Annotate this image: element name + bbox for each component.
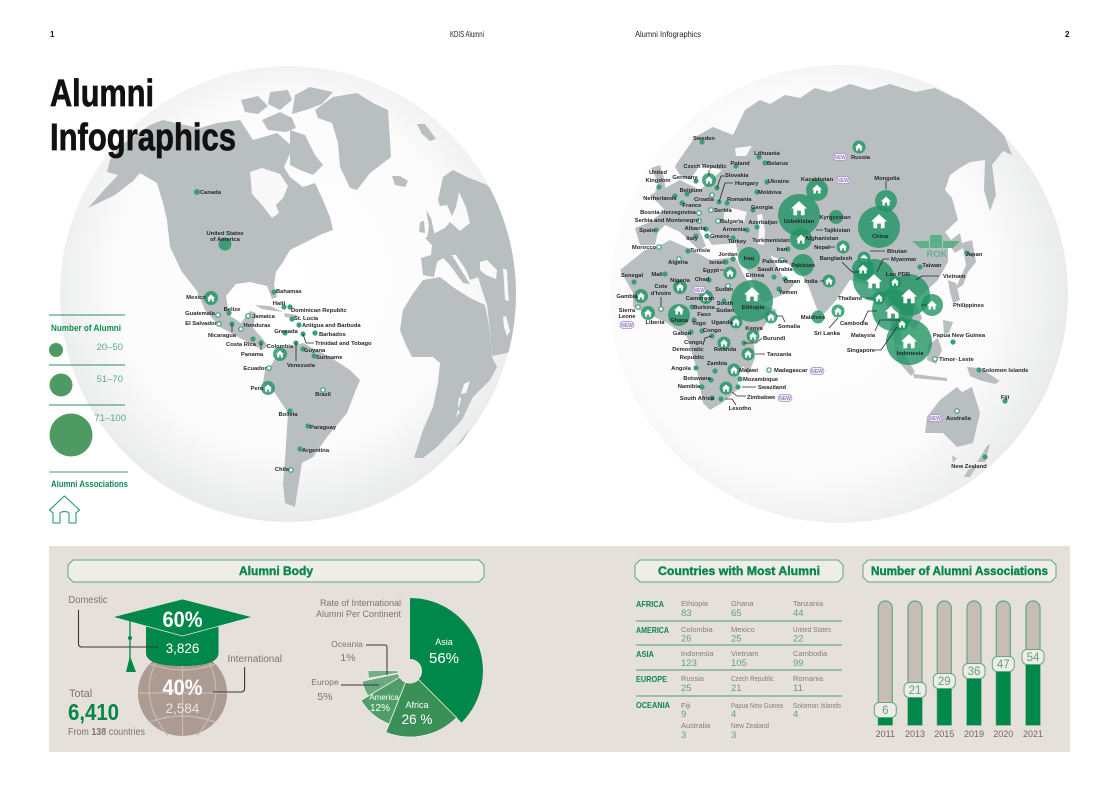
icon: globe (138, 650, 227, 736)
chart label: Oceania: 1% (340, 652, 356, 664)
labels: Oceania: New Zealand (951, 464, 987, 470)
labels: Europe (635, 136, 790, 245)
row: Europe: Romania (793, 674, 824, 683)
labels: Africa: Nigeria (670, 278, 691, 284)
labels: Americas: Bolivia (278, 412, 298, 418)
labels: Americas: Trinidad and Tobago (315, 341, 372, 347)
labels: Asia: Bhutan (887, 249, 907, 255)
legend: medium circle (50, 374, 72, 396)
icon: house outline (50, 496, 80, 523)
markers: Europe (653, 139, 770, 241)
labels: Africa: Sierra (619, 308, 636, 314)
labels: Americas: St. Lucia (294, 316, 319, 322)
labels: Americas: Jamaica (252, 314, 276, 320)
row: Africa: 44 (793, 608, 804, 619)
row: America: Colombia (681, 625, 714, 634)
labels: Oceania: Solomon Islands (982, 368, 1028, 374)
row: Europe: Russia (681, 674, 705, 683)
page header (50, 30, 1070, 39)
labels: Europe: Hungary (735, 181, 759, 187)
labels: Oceania (933, 333, 1028, 470)
bar: 2019 (963, 601, 985, 739)
labels: Europe: Greece (710, 234, 730, 240)
labels: Africa: Zambia (707, 361, 728, 367)
labels: Africa: Gambia (616, 294, 638, 300)
labels: Asia: Thailand (838, 296, 862, 302)
labels: Africa: Rwanda (714, 347, 737, 353)
labels: Europe: Romania (727, 197, 752, 203)
labels: Americas: Antigua and Barbuda (302, 323, 361, 329)
emblem: ROK (912, 235, 960, 259)
labels: Africa: Ghana (670, 318, 689, 324)
labels: Asia: Mongolia (874, 176, 900, 182)
labels: Europe: Serbia (714, 208, 732, 214)
markers: Americas (194, 189, 325, 472)
labels: Africa (616, 245, 808, 412)
bar: 2015: 2015 (934, 729, 954, 739)
labels: Americas: Venezuela (287, 363, 316, 369)
labels: Europe: Italy (686, 236, 699, 242)
labels: Africa: South (717, 301, 734, 307)
row: Oceania: OCEANIA (636, 700, 670, 710)
labels: Oceania: Papua New Guinea (933, 333, 986, 339)
labels: Europe: Germany (672, 175, 698, 181)
callout: international (213, 653, 282, 692)
badges: NEW: NEW (779, 396, 791, 402)
page header: 2 (1065, 30, 1070, 39)
labels: Asia: Kyrgyzstan (819, 215, 851, 221)
labels: Asia: Jordan (718, 252, 738, 258)
labels: Africa: Togo (692, 321, 706, 327)
labels: Africa: South Africa (680, 396, 715, 402)
chart label: Oceania (331, 639, 387, 675)
labels: Asia: Vietnam (943, 274, 965, 280)
labels: Asia: Bangladesh (820, 256, 853, 262)
labels: Asia: Nepal (814, 245, 830, 251)
labels: Africa: Gabon (673, 331, 692, 337)
labels: Europe: Ukraine (768, 179, 790, 185)
chart label: Oceania: Oceania (331, 639, 363, 649)
chart label: Asia (429, 637, 459, 667)
row: Asia: 105 (731, 658, 747, 669)
heading: associations (863, 560, 1056, 582)
value: total alumni: 6,410 (68, 699, 119, 725)
labels: Americas: Guatemala (185, 311, 216, 317)
labels: Asia: Timor- Leste (939, 357, 974, 363)
bar: 2021 (1022, 601, 1044, 739)
labels: Europe: Kingdom (645, 178, 671, 184)
labels: Africa: Madagascar (774, 368, 808, 374)
labels: Africa: Kenya (745, 326, 763, 332)
bar: 2019: 36 (968, 666, 980, 678)
row: Africa: AFRICA (636, 599, 664, 609)
labels: Asia: Indonesia (896, 351, 924, 357)
callout: domestic (68, 595, 158, 647)
bar: 2011: 2011 (876, 729, 895, 739)
panel: statistics background (49, 546, 1070, 752)
markers: Africa (631, 245, 785, 405)
chart label: Europe: Europe (311, 677, 339, 687)
chart label: Europe: 5% (317, 691, 333, 703)
row: America: United States (793, 625, 831, 634)
chart label: Africa (402, 700, 432, 727)
value: total alumni: Total (69, 688, 92, 700)
labels: Africa: Sudan (715, 287, 733, 293)
labels: Africa: Angola (671, 366, 692, 372)
bar: 2020: 2020 (993, 729, 1013, 739)
row: Asia (636, 649, 828, 669)
emblem: ROK: ROK (927, 249, 948, 259)
chart label: Europe (311, 677, 379, 703)
badges: NEW (620, 154, 942, 422)
labels: Americas: of America (210, 237, 241, 243)
labels: Asia: Russia (851, 155, 871, 161)
chart: alumni per continent pie (361, 598, 483, 737)
labels: Europe: Moldova (758, 190, 782, 196)
heading: associations: Number of Alumni Associations (871, 564, 1048, 578)
row: Oceania: Fiji (681, 701, 691, 710)
bar: 2013: 21 (909, 685, 921, 697)
labels: Americas: Suriname (316, 355, 343, 361)
row: Asia: 123 (681, 658, 697, 669)
labels: Europe: Armenia (722, 227, 746, 233)
bar: 2020 (992, 601, 1014, 739)
labels: Oceania: Fiji (1001, 395, 1010, 401)
chart label: America: America (369, 693, 399, 702)
title (50, 73, 236, 159)
labels: Europe: Albania (685, 226, 706, 232)
labels: Americas: Belize (224, 307, 241, 313)
labels: Africa: Republic (680, 355, 705, 361)
labels: Europe: Bosnia-Herzegovina (640, 210, 697, 216)
labels: Asia: Uzbekistan (784, 219, 815, 225)
panel: alumni body (68, 560, 484, 738)
row: Africa: Ethiopia (681, 599, 709, 608)
labels: Asia: Israel (709, 260, 725, 266)
legend: large circle (50, 414, 92, 456)
labels: Americas: Dominican Republic (291, 308, 347, 314)
bar: 2011: 6 (882, 705, 889, 717)
labels: Americas: Honduras (243, 323, 271, 329)
labels: Africa: Morocco (632, 245, 657, 251)
labels: Europe: United (649, 170, 667, 176)
value: total alumni (68, 688, 145, 738)
row: Asia: 99 (793, 658, 804, 669)
labels: Africa: Senegal (621, 273, 644, 279)
legend: alumni associations (49, 472, 128, 523)
chart label: Asia: 56% (429, 650, 459, 667)
legend: number of alumni: Number of Alumni (51, 323, 121, 333)
legend: alumni associations: Alumni Associations (51, 479, 128, 489)
chart label: Asia: Asia (435, 637, 453, 647)
row: Oceania (636, 700, 841, 741)
labels: Americas: Mexico (186, 295, 206, 301)
chart label: America: 12% (370, 703, 390, 714)
labels: Europe: Georgia (751, 205, 774, 211)
labels: Americas: Bahamas (276, 289, 302, 295)
chart label: title: Rate of International (320, 598, 401, 608)
labels: Africa: Burkina (693, 305, 716, 311)
bar: 2019: 2019 (964, 729, 984, 739)
labels: Africa: Cameroon (686, 296, 715, 302)
globe: Eurasia, Africa and Oceania (610, 65, 1068, 523)
row: Europe (636, 674, 824, 694)
legend: small circle (49, 343, 63, 357)
panel: countries with most alumni (635, 560, 843, 741)
row: Europe: EUROPE (636, 674, 667, 684)
labels: Americas: Ecuador (243, 366, 267, 372)
labels: Africa: Faso (697, 312, 711, 318)
labels: Africa: Sudan (716, 308, 734, 314)
labels: Americas: Canada (200, 190, 222, 196)
badges: NEW: NEW (811, 369, 823, 375)
labels: Africa: Tanzania (767, 352, 792, 358)
labels: Asia: Lao PDR (886, 272, 911, 278)
row: Oceania: Solomon Islands (793, 701, 841, 710)
labels: Europe: Croatia (694, 197, 715, 203)
labels: Asia: China (872, 234, 889, 240)
labels: Asia: Afghanistan (805, 236, 839, 242)
labels: Americas (185, 190, 372, 473)
row: Europe: Czech Republic (731, 674, 774, 683)
badges: NEW: NEW (621, 323, 633, 329)
row: Oceania: 3 (731, 730, 736, 741)
labels: Asia: Saudi Arabia (757, 267, 793, 273)
bar: 2021: 2021 (1023, 729, 1043, 739)
bar: 2020: 47 (997, 659, 1010, 671)
labels: Africa: Cote (655, 284, 668, 290)
labels: Europe: Slovakia (725, 173, 749, 179)
labels: Americas: El Salvador (185, 321, 218, 327)
badges: NEW: NEW (693, 288, 705, 294)
row: America: 22 (793, 634, 804, 644)
labels: Africa: Uganda (711, 320, 733, 326)
heading: alumni body: Alumni Body (239, 564, 313, 578)
labels: Asia: Pakistan (791, 263, 815, 269)
labels: Africa: Ethiopia (742, 305, 765, 311)
legend: number of alumni (49, 315, 126, 456)
labels: Asia: Iran (777, 247, 788, 253)
bar: 2015 (933, 601, 955, 739)
labels: Asia: Kazakhstan (801, 177, 834, 183)
row: Asia: Vietnam (731, 649, 758, 658)
labels: Africa: Eritrea (746, 273, 765, 279)
labels: Europe: Turkey (728, 239, 747, 245)
value: total alumni: From 138 countries (68, 727, 145, 738)
row: Europe: 21 (731, 683, 742, 694)
row: Africa: Ghana (731, 599, 754, 608)
labels: Asia: Philippines (953, 303, 984, 309)
labels: Africa: Swaziland (758, 385, 786, 391)
labels: Asia: Japan (966, 252, 983, 258)
labels: Asia: Maldives (801, 315, 825, 321)
labels: Africa: Tunisia (690, 248, 711, 254)
labels: Asia: Malaysia (851, 333, 876, 339)
heading: alumni body (68, 560, 484, 582)
heading: countries (635, 560, 843, 582)
markers: Asia (723, 140, 970, 365)
labels: Asia: Cambodia (840, 321, 869, 327)
chart label: America (369, 693, 399, 714)
labels: Americas: Panama (241, 352, 264, 358)
labels: Asia: Yemen (779, 290, 798, 296)
row: Oceania: Papua New Guinea (731, 701, 784, 710)
legend: number of alumni: 71–100 (94, 413, 126, 424)
row: Oceania: New Zealand (731, 721, 769, 730)
row: Asia: ASIA (636, 649, 654, 659)
labels: Africa: Somalia (778, 324, 801, 330)
row: Africa: 83 (681, 608, 692, 619)
labels: Americas: United States (206, 231, 244, 237)
labels: Americas: Haiti (273, 301, 286, 307)
line: domestic connector end (135, 646, 158, 648)
markers: Oceania (933, 339, 1008, 460)
row: America: 25 (731, 634, 742, 644)
legend: number of alumni: 20–50 (97, 342, 123, 353)
labels: Africa: Burundi (763, 336, 786, 342)
labels: Europe: Czech Republic (683, 164, 727, 170)
labels: Europe: Azerbaijan (748, 220, 778, 226)
row: Africa (636, 599, 824, 619)
labels: Americas: Paraguay (310, 425, 337, 431)
value: domestic count: 3,826 (166, 641, 199, 656)
row: Asia: Indonesia (681, 649, 714, 658)
labels: Africa: Egypt (703, 268, 719, 274)
bar: 2015: 29 (938, 676, 951, 688)
row: America: AMERICA (636, 625, 669, 635)
badges: NEW: NEW (837, 178, 849, 184)
title: Alumni (50, 73, 154, 115)
title: Infographics (50, 117, 236, 159)
labels: Africa: d'Ivoire (651, 291, 672, 297)
labels: Europe: Sweden (693, 136, 715, 142)
labels: Americas: Chile (275, 467, 290, 473)
labels: Europe: Bulgaria (720, 219, 744, 225)
chart label: title: Alumni Per Continent (316, 609, 401, 619)
labels: Asia: Turkmenistan (752, 238, 790, 244)
value: international count: 2,584 (166, 701, 200, 716)
labels: Africa: Mozambique (743, 377, 779, 383)
chart label: Africa: 26 % (402, 712, 432, 727)
labels: Asia: Singapore (847, 348, 876, 354)
row: Europe: 25 (681, 683, 692, 694)
chart label: title (316, 598, 401, 619)
row: America: 26 (681, 634, 692, 644)
row: Africa: Tanzania (793, 599, 824, 608)
heading: countries: Countries with Most Alumni (658, 564, 820, 578)
chart label: Africa: Africa (405, 700, 429, 710)
labels: Europe: Spain (639, 228, 655, 234)
labels: Asia (709, 155, 984, 363)
row: Oceania: 4 (793, 709, 798, 720)
value: domestic share: 60% (162, 607, 202, 632)
labels: Americas: Costa Rica (226, 342, 257, 348)
labels: Americas: Peru (251, 386, 264, 392)
legend: number of alumni: 51–70 (97, 374, 123, 385)
globe: Americas (60, 66, 522, 522)
value: international share: 40% (162, 675, 202, 700)
labels: Africa: Malawi (739, 368, 758, 374)
labels: Europe: Lithuania (754, 151, 781, 157)
row: Oceania: 9 (681, 709, 686, 720)
labels: Americas: Nicaragua (208, 333, 237, 339)
row: America (636, 625, 831, 644)
labels: Americas: Brazil (315, 392, 331, 398)
badges: NEW: NEW (834, 155, 846, 161)
labels: Asia: Myanmar (891, 257, 917, 263)
row: Africa: 65 (731, 608, 742, 619)
labels: Africa: Democratic (672, 347, 705, 353)
labels: Africa: Mali (651, 272, 663, 278)
labels: Asia: India (804, 279, 819, 285)
labels: Africa: Congo, (684, 340, 704, 346)
icon: graduation cap (112, 599, 252, 672)
labels: Americas: Guyana (304, 348, 326, 354)
labels: Africa: Congo (703, 328, 722, 334)
bar: 2021: 54 (1027, 652, 1040, 664)
labels: Americas: Barbados (319, 332, 346, 338)
row: America: Mexico (731, 625, 755, 634)
labels: Asia: Tajikistan (824, 228, 851, 234)
page header: 1 (50, 30, 55, 39)
labels: Africa: Algeria (668, 260, 689, 266)
page header: Alumni Infographics (635, 30, 701, 39)
labels: Africa: Namibia (678, 384, 701, 390)
labels: Africa: Botswana (683, 376, 711, 382)
labels: Asia: Oman (784, 279, 801, 285)
labels: Americas: Colombia (267, 344, 294, 350)
labels: Europe: Belgium (680, 188, 702, 194)
labels: Africa: Liberia (645, 320, 665, 326)
labels: Asia: Taiwan (922, 263, 942, 269)
row: Oceania: 4 (731, 709, 736, 720)
labels: Europe: Poland (730, 161, 750, 167)
row: Oceania: Australia (681, 721, 711, 730)
labels: Asia: Palestine (762, 259, 788, 265)
labels: Europe: Netherlands (643, 196, 677, 202)
labels: Europe: Serbia and Montenegro (635, 218, 700, 224)
callout: domestic: Domestic (68, 595, 108, 606)
row: Oceania: 3 (681, 730, 686, 741)
labels: Americas: Argentina (302, 448, 330, 454)
labels: Europe: Belarus (767, 161, 788, 167)
bar: 2011 (874, 601, 896, 739)
bar: 2013 (904, 601, 926, 739)
labels: Europe: France (682, 203, 702, 209)
labels: Africa: Chad (695, 277, 710, 283)
panel: number of alumni associations (863, 560, 1056, 739)
labels: Africa: Leone (618, 314, 636, 320)
bar: 2013: 2013 (905, 729, 925, 739)
labels: Americas: Grenada (274, 329, 299, 335)
labels: Oceania: Australia (946, 416, 972, 422)
row: Europe: 11 (793, 683, 803, 694)
labels: Africa: Lesotho (729, 406, 752, 412)
row: Asia: Cambodia (793, 649, 828, 658)
labels: Africa: Zimbabwe (747, 395, 776, 401)
badges: NEW: NEW (929, 416, 941, 422)
labels: Asia: Sri Lanka (814, 331, 841, 337)
labels: Asia: Iraq (744, 256, 755, 262)
page header: KDIS Alumni (450, 30, 484, 39)
callout: international: International (228, 653, 282, 665)
